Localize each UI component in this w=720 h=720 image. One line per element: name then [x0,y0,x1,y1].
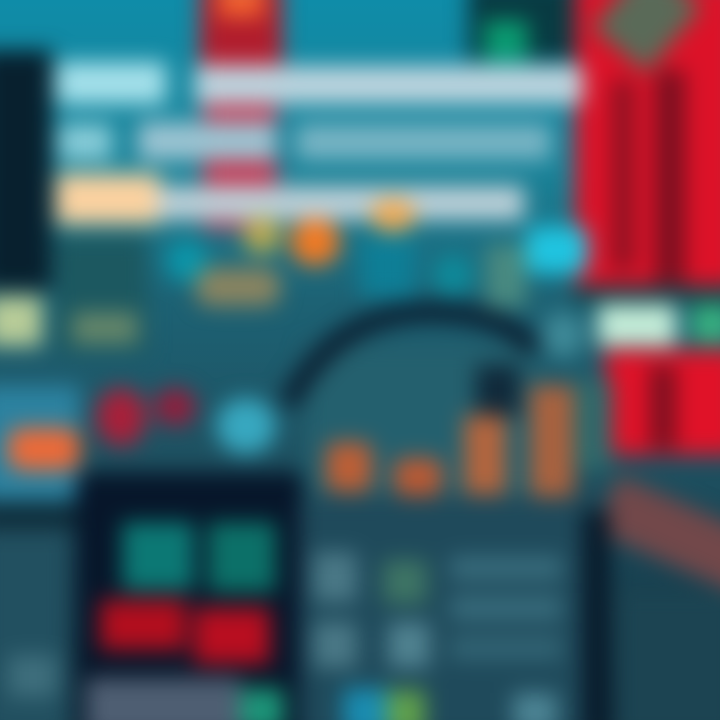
lower dark window [650,365,676,450]
dark tower [476,365,520,417]
brown diagonal [595,475,720,595]
lower red wall [605,350,720,455]
title line 2 left [58,124,112,160]
right rows 2 [450,596,562,620]
column 1 top [313,552,357,602]
bottom green chip [387,690,425,720]
right rows [450,556,562,580]
gold dot [243,216,281,254]
orange pill [8,428,80,470]
right lower block [615,590,720,720]
green readout left [122,522,194,590]
bar 4 [530,385,574,497]
title line 3 right [158,186,524,220]
title line 2 right [296,124,551,160]
red wall [575,0,720,290]
bar 2 [394,458,442,496]
bottom grey chip [513,693,557,720]
teal dot right [432,254,474,296]
left dark column [0,50,52,290]
column 2 bottom [388,622,430,668]
title line 3 accent [56,174,160,224]
title line 1 [56,62,166,104]
table background [300,498,590,720]
green corner [240,688,284,720]
right dark divider [582,510,610,720]
teal block centre [360,235,416,297]
teal dot [166,240,208,282]
cyan pill [526,226,588,274]
red banner top centre [200,0,282,65]
orange banner light [218,0,264,18]
red readout 2 [194,608,270,664]
title line 2 middle [138,122,276,160]
dark block left [55,235,147,353]
side panel [0,530,70,720]
dark window 2 [655,70,685,285]
olive sign [72,312,138,344]
bar 1 [326,442,372,492]
dark window strip [593,0,701,73]
column 1 bottom [313,622,357,668]
green sign tip [692,300,720,342]
dark column top right [468,0,574,60]
cyan circle [216,398,276,454]
side tower [576,380,612,470]
centre vertical red band [203,60,277,230]
white green sign [598,302,676,346]
bottom blue chip [343,688,387,720]
green light [484,20,528,60]
amber dot [370,198,416,232]
chart field [305,345,535,495]
title line 1 right [195,66,583,104]
grey strip [86,678,241,720]
bar 3 [464,415,506,495]
red readout 1 [100,600,186,650]
side tile [8,655,58,697]
red shape 2 [154,388,196,426]
tan pill [196,268,280,306]
red shape 1 [96,388,146,446]
column 2 top [383,560,427,604]
orange dot [290,218,340,266]
dark gap [575,286,720,304]
dark window 1 [612,80,634,270]
pale sign left [0,296,42,346]
right rows 3 [450,636,562,660]
blue panel [0,385,80,500]
dark band [0,503,90,529]
teal dot on top [542,312,584,358]
green block [486,245,526,307]
green readout right [208,522,276,592]
board frame [76,472,304,720]
